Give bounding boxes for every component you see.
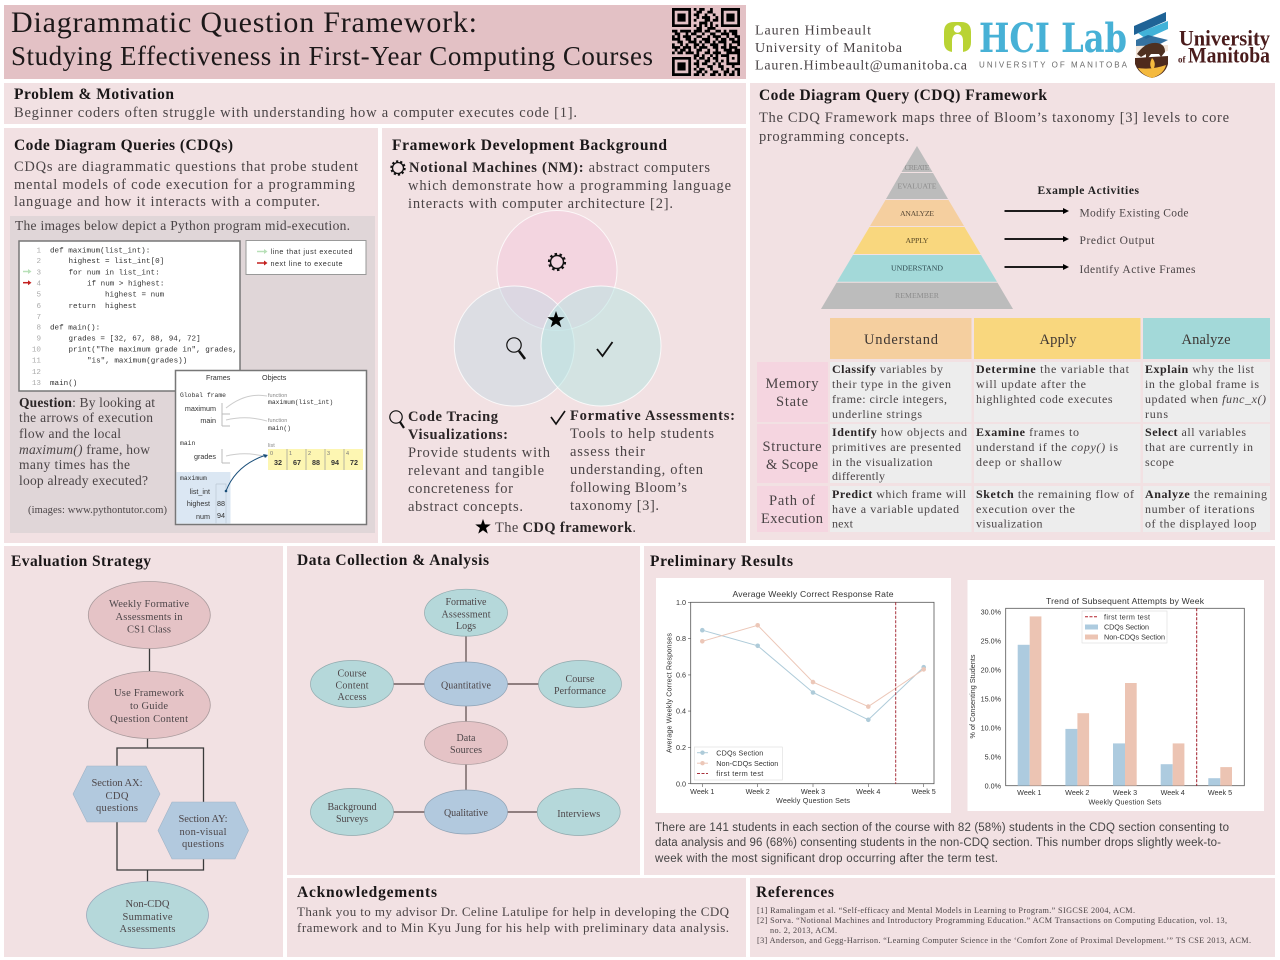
memory diagram: main	[200, 416, 216, 425]
table: concept by level: in the global frame is	[1145, 377, 1259, 391]
bar chart: trend of subsequent attempts	[968, 580, 1264, 811]
panel: acknowledgements: framework and to Min Kyu Jung for his help with preliminary data analysis.	[297, 920, 729, 935]
heading: preliminary results: Preliminary Results	[650, 553, 793, 570]
node: section AY: non-visual	[180, 827, 227, 838]
connectors	[393, 636, 539, 812]
pyramid: Bloom's taxonomy: REMEMBER	[895, 291, 940, 300]
panel: references: no. 2, 2013, ACM.	[770, 926, 837, 935]
bar chart: trend of subsequent attempts: Week 2	[1065, 788, 1089, 797]
question text: the arrows of execution	[19, 410, 153, 425]
line chart: average weekly correct response rate: Average Weekly Correct Response Rate	[732, 589, 894, 599]
bar chart: trend of subsequent attempts: Trend of Subsequent Attempts by Week	[1046, 596, 1205, 606]
node: qualitative	[424, 790, 508, 834]
question text: Question: By looking at	[19, 395, 155, 410]
line chart: average weekly correct response rate: 0.2	[676, 743, 686, 752]
pyramid: Bloom's taxonomy	[821, 146, 1013, 309]
text block: code tracing visualizations: Provide students with	[408, 445, 551, 461]
icon: check mark	[597, 342, 612, 356]
table: concept by level: Structure	[762, 439, 822, 455]
node: summative assessments: Assessments	[120, 924, 176, 935]
code listing: 5	[36, 292, 41, 300]
table: concept by level: next	[832, 516, 854, 530]
text block: CDQ definition	[14, 159, 358, 210]
bar chart: trend of subsequent attempts: Week 5	[1208, 788, 1232, 797]
table: concept by level: Predict which frame will	[832, 487, 967, 501]
venn diagram	[454, 210, 661, 406]
flow connectors	[117, 648, 204, 882]
logo: HCI Lab: HCI Lab	[979, 15, 1127, 62]
table: concept by level: have a variable updated	[832, 502, 959, 516]
table: concept by level: Execution	[761, 511, 824, 527]
line chart: average weekly correct response rate: 0.0	[676, 779, 686, 788]
memory diagram: main()	[268, 425, 291, 432]
line chart: average weekly correct response rate: 0.4	[676, 707, 686, 716]
image credit: (images: www.pythontutor.com)	[28, 505, 168, 516]
code listing: def main():	[50, 324, 100, 332]
memory diagram: 2	[308, 451, 311, 457]
node: background surveys	[310, 788, 394, 836]
table: concept by level: execution over the	[976, 502, 1075, 516]
node: data sources: Sources	[450, 745, 482, 756]
arrow: identify active frames	[1004, 264, 1196, 276]
code listing: highest = num	[105, 292, 165, 300]
table: concept by level: that are currently in	[1145, 440, 1253, 454]
logo: HCI Lab: UNIVERSITY OF MANITOBA	[979, 60, 1128, 70]
panel: CDQ framework	[750, 83, 1275, 540]
code listing: print("The maximum grade in", grades,	[68, 346, 237, 354]
node: course content access	[310, 660, 394, 708]
node: section AX: questions	[96, 803, 138, 814]
node: course content access: Content	[336, 680, 369, 692]
example activities heading: Example Activities	[1038, 185, 1140, 197]
bar chart: trend of subsequent attempts: 30.0%	[981, 607, 1002, 616]
arrow legend: next line to execute	[270, 259, 342, 268]
arrow: modify existing code	[1004, 208, 1188, 220]
panel: acknowledgements: Acknowledgements	[297, 884, 437, 901]
text block: notional machines: Notional Machines (NM): abstract computers	[409, 160, 710, 176]
bar chart: trend of subsequent attempts: 0.0%	[985, 781, 1002, 790]
memory diagram: highest	[187, 499, 210, 508]
node: section AY	[158, 802, 248, 859]
node: use framework: to Guide	[130, 701, 168, 712]
arrow legend: line that just executed	[270, 247, 352, 256]
line chart: average weekly correct response rate: CDQs Section	[716, 748, 763, 757]
code listing: main()	[50, 380, 77, 388]
table: concept by level: underline strings	[832, 407, 922, 421]
line chart: average weekly correct response rate: 1.0	[676, 598, 686, 607]
node: summative assessments	[86, 882, 208, 948]
node: section AY: Section AY:	[178, 814, 228, 825]
table: concept by level: State	[776, 394, 808, 410]
panel: problem and motivation: Problem & Motivation	[14, 86, 174, 103]
text block: formative assessments: taxonomy [3].	[570, 498, 659, 514]
table: concept by level: their type in the given	[832, 377, 951, 391]
node: course performance	[538, 660, 622, 708]
code listing: 13	[32, 380, 41, 388]
author block	[755, 24, 968, 74]
code listing: 1	[36, 248, 41, 256]
question text: flow and the local	[19, 426, 121, 441]
node: course content access: Access	[338, 692, 367, 703]
memory diagram: 3	[327, 451, 330, 457]
table: concept by level: Select all variables	[1145, 425, 1246, 439]
memory diagram: grades	[194, 452, 216, 461]
line chart: average weekly correct response rate: 0.8	[676, 634, 686, 643]
panel: code diagram queries	[4, 128, 378, 543]
table: concept by level: & Scope	[766, 457, 818, 473]
example inset	[10, 216, 375, 533]
table: concept by level: Explain why the list	[1145, 362, 1255, 376]
line chart: average weekly correct response rate: Weekly Question Sets	[776, 796, 850, 805]
bar chart: trend of subsequent attempts: 25.0%	[981, 636, 1002, 645]
panel: acknowledgements	[287, 878, 746, 957]
code listing: 9	[36, 336, 41, 344]
bar chart: trend of subsequent attempts: first term test	[1104, 612, 1150, 621]
bar chart: trend of subsequent attempts: 10.0%	[981, 723, 1002, 732]
panel: acknowledgements: Thank you to my advisor Dr. Celine Latulipe for help in developing the CDQ	[297, 904, 730, 919]
table: concept by level: Identify how objects and	[832, 425, 967, 439]
arrow: identify active frames: Identify Active Frames	[1080, 264, 1196, 276]
node: use framework: Question Content	[110, 714, 188, 725]
memory diagram: 88	[312, 458, 320, 467]
memory diagram: 94	[217, 511, 225, 520]
pyramid: Bloom's taxonomy: APPLY	[906, 236, 929, 245]
arrow: modify existing code: Modify Existing Code	[1080, 208, 1188, 220]
code listing: 4	[36, 280, 41, 288]
node: qualitative: Qualitative	[444, 808, 489, 819]
panel: problem and motivation: Beginner coders often struggle with understanding how a computer executes code [1].	[14, 105, 577, 121]
code listing: if num > highest:	[87, 280, 164, 288]
pyramid: Bloom's taxonomy: ANALYZE	[900, 209, 934, 218]
code listing: 3	[36, 270, 41, 278]
text block: formative assessments: assess their	[570, 444, 645, 460]
text block: code tracing visualizations	[408, 409, 551, 515]
memory diagram: 0	[270, 451, 273, 457]
text block: results summary: There are 141 students in each section of the course with 82 (58%) students in the CDQ section consenting to	[655, 822, 1229, 834]
title banner: Diagrammatic Question Framework:	[11, 6, 477, 39]
bar chart: trend of subsequent attempts: Week 1	[1017, 788, 1041, 797]
text block: results summary: week with the most significant drop occurring after the term test.	[654, 853, 998, 865]
logo: University of Manitoba crest	[1134, 12, 1270, 78]
text block: formative assessments	[570, 408, 735, 514]
table: concept by level: in the visualization	[832, 455, 932, 469]
arrow legend	[246, 240, 366, 274]
pyramid: Bloom's taxonomy: CREATE	[904, 163, 930, 172]
code listing: 7	[36, 314, 41, 322]
bar chart: trend of subsequent attempts: 5.0%	[985, 752, 1002, 761]
panel: references	[750, 878, 1275, 957]
text block: results summary: data analysis and 96 (68%) consenting students in the non-CDQ section. This number drops slightly week-to-	[655, 837, 1221, 849]
arrow: predict output: Predict Output	[1080, 235, 1155, 247]
table: concept by level	[757, 318, 1270, 532]
icon: star	[547, 311, 565, 327]
heading: CDQ framework: Code Diagram Query (CDQ) Framework	[759, 87, 1047, 104]
logo: HCI Lab	[944, 15, 1128, 70]
table: concept by level: Analyze the remaining	[1145, 487, 1267, 501]
icon: check legend	[551, 411, 565, 424]
pyramid: Bloom's taxonomy: EVALUATE	[898, 182, 937, 190]
code listing: grades = [32, 67, 88, 94, 72]	[68, 336, 201, 344]
memory diagram: Objects	[262, 373, 287, 382]
text block: formative assessments: following Bloom’s	[570, 480, 687, 496]
icon: magnifier legend	[390, 411, 404, 428]
text block: framework intro: The CDQ Framework maps three of Bloom’s taxonomy [3] levels to core	[759, 110, 1229, 126]
memory diagram: Frames	[206, 373, 231, 382]
panel: references: [3] Anderson, and Gegg-Harrison. “Learning Computer Science in the ‘Comfort Zone of Proximal Development.’” TS CSE 2013, ACM.	[757, 936, 1251, 945]
node: use framework: Use Framework	[114, 688, 185, 699]
table: concept by level: Analyze	[1182, 332, 1230, 348]
code listing: for num in list_int:	[68, 270, 160, 278]
line chart: average weekly correct response rate: 0.6	[676, 670, 686, 680]
memory diagram: num	[196, 512, 210, 521]
table: concept by level: understand if the copy() is	[976, 440, 1118, 454]
panel: references: [2] Sorva. “Notional Machines and Introductory Programming Education.” ACM Transactions on Computing Education, vol. 13,	[757, 916, 1227, 925]
code listing	[19, 241, 240, 391]
table: concept by level: differently	[832, 469, 885, 483]
heading: CDQs: Code Diagram Queries (CDQs)	[14, 137, 233, 154]
logo: University of Manitoba crest: Manitoba	[1188, 42, 1270, 68]
node: interviews: Interviews	[557, 809, 600, 820]
node: formative logs: Formative	[446, 597, 487, 608]
author block: Lauren Himbeault	[755, 24, 871, 38]
table: concept by level: primitives are presented	[832, 440, 961, 454]
table: concept by level: Determine the variable that	[976, 362, 1130, 376]
memory diagram: list_int	[190, 487, 210, 496]
node: data sources	[424, 722, 508, 764]
code listing: highest = list_int[0]	[68, 258, 164, 266]
icon: gear	[549, 254, 565, 270]
bar chart: trend of subsequent attempts: Weekly Question Sets	[1088, 798, 1162, 806]
node: section AX	[73, 766, 160, 822]
line chart: average weekly correct response rate: Week 1	[690, 787, 714, 796]
text block: results summary	[654, 822, 1229, 865]
node: course content access: Course	[338, 668, 367, 680]
table: concept by level: number of iterations	[1145, 502, 1255, 516]
memory diagram: maximum	[180, 475, 207, 482]
panel: evaluation strategy	[4, 546, 283, 957]
memory diagram: list	[268, 443, 275, 449]
table: concept by level: runs	[1145, 407, 1168, 421]
table: concept by level: scope	[1145, 455, 1174, 469]
memory diagram: maximum(list_int)	[268, 399, 333, 406]
memory diagram: 94	[331, 458, 339, 467]
memory diagram	[176, 370, 366, 524]
node: formative logs: Assessment	[442, 610, 491, 620]
memory diagram: 4	[346, 451, 349, 457]
table: concept by level: highlighted code executes	[976, 392, 1113, 406]
text block: code tracing visualizations: relevant and tangible	[408, 463, 544, 479]
memory diagram: 32	[274, 458, 282, 467]
example inset: The images below depict a Python program mid-execution.	[15, 218, 350, 233]
memory diagram: main	[180, 440, 196, 447]
memory diagram: Global frame	[180, 392, 226, 399]
bar chart: trend of subsequent attempts: Week 4	[1161, 788, 1185, 797]
node: use framework	[88, 672, 210, 738]
node: weekly formative assessments: CS1 Class	[127, 624, 171, 636]
code listing: 11	[32, 358, 41, 366]
code listing: 8	[36, 324, 41, 332]
text block: notional machines: interacts with computer architecture [2].	[408, 196, 673, 212]
author block: Lauren.Himbeault@umanitoba.ca	[755, 58, 968, 74]
node: weekly formative assessments: Weekly Formative	[109, 599, 189, 610]
text block: formative assessments: understanding, often	[570, 462, 704, 478]
table: concept by level: frame: circle integers,	[832, 392, 947, 406]
bar chart: trend of subsequent attempts: Week 3	[1113, 788, 1137, 797]
panel: preliminary results	[644, 546, 1275, 875]
line chart: average weekly correct response rate: Average Weekly Correct Responses	[664, 633, 674, 753]
logo: University of Manitoba crest: University	[1179, 26, 1270, 50]
panel: references: [1] Ramalingam et al. “Self-efficacy and Mental Models in Learning to Program.” SIGCSE 2004, ACM.	[757, 906, 1135, 915]
text block: CDQ definition: mental models of code execution for a programming	[14, 177, 355, 193]
code listing: def maximum(list_int):	[50, 248, 150, 256]
node: weekly formative assessments: Assessments in	[116, 612, 183, 623]
table: concept by level: Apply	[1040, 332, 1077, 348]
table: concept by level: Path of	[769, 493, 815, 509]
line chart: average weekly correct response rate: Week 4	[856, 787, 880, 796]
memory diagram: maximum	[185, 404, 216, 413]
heading: data collection: Data Collection & Analysis	[297, 552, 489, 569]
title banner	[4, 5, 746, 79]
question text	[19, 395, 155, 488]
table: concept by level: Memory	[766, 376, 819, 392]
bar chart: trend of subsequent attempts: % of Consenting Students	[968, 654, 977, 738]
heading: framework background: Framework Development Background	[392, 137, 667, 154]
node: quantitative	[424, 662, 508, 706]
question text: many times has the	[19, 457, 130, 472]
node: section AY: questions	[182, 839, 224, 850]
node: weekly formative assessments	[88, 582, 210, 648]
icon: gear legend	[391, 161, 405, 175]
line chart: average weekly correct response rate	[656, 578, 951, 813]
table: concept by level: visualization	[976, 516, 1042, 530]
text block: framework intro: programming concepts.	[759, 129, 909, 145]
node: background surveys: Background	[328, 802, 376, 813]
text block: code tracing visualizations: Code Tracing	[408, 409, 499, 425]
panel: problem and motivation	[4, 83, 746, 124]
text block: code tracing visualizations: abstract concepts.	[408, 499, 523, 515]
text block: code tracing visualizations: concreteness for	[408, 481, 513, 497]
node: section AX: Section AX:	[92, 778, 143, 789]
text block: CDQ definition: language and how it interacts with a computer.	[14, 194, 320, 210]
memory diagram: 1	[289, 451, 292, 457]
code listing: "is", maximum(grades))	[87, 358, 187, 366]
node: interviews	[537, 788, 620, 836]
star legend: The CDQ framework.	[495, 520, 636, 536]
text block: formative assessments: Tools to help students	[570, 426, 714, 442]
text block: formative assessments: Formative Assessments:	[570, 408, 735, 424]
question text: maximum() frame, how	[19, 442, 150, 457]
line chart: average weekly correct response rate: Week 3	[801, 787, 825, 796]
table: concept by level: Classify variables by	[832, 362, 943, 376]
node: formative logs: Logs	[456, 621, 476, 632]
node: course performance: Course	[566, 674, 595, 685]
question text: loop already executed?	[19, 473, 148, 488]
line chart: average weekly correct response rate: Week 5	[912, 787, 936, 796]
text block: code tracing visualizations: Visualizations:	[408, 427, 508, 443]
memory diagram: function	[268, 418, 287, 424]
node: section AX: CDQ	[106, 791, 129, 802]
code listing: return highest	[68, 303, 137, 311]
table: concept by level: Understand	[864, 332, 939, 348]
panel: framework development background	[382, 128, 746, 543]
pyramid: Bloom's taxonomy: UNDERSTAND	[891, 264, 943, 272]
panel: references: References	[756, 884, 834, 901]
line chart: average weekly correct response rate: first term test	[716, 769, 763, 778]
node: quantitative: Quantitative	[441, 680, 492, 692]
memory diagram: 72	[350, 458, 358, 467]
text block: notional machines	[408, 160, 731, 212]
arrow: predict output	[1004, 235, 1155, 247]
line chart: average weekly correct response rate: Non-CDQs Section	[716, 759, 778, 768]
code listing: 2	[36, 258, 41, 266]
heading: evaluation: Evaluation Strategy	[11, 553, 151, 570]
memory diagram: 88	[217, 499, 225, 508]
logo: University of Manitoba crest: of	[1178, 54, 1186, 64]
text block: framework intro	[759, 110, 1229, 145]
code listing: 10	[32, 346, 41, 354]
table: concept by level: updated when func_x()	[1145, 392, 1266, 406]
text block: notional machines: which demonstrate how a programming language	[408, 178, 731, 194]
bar chart: trend of subsequent attempts: 15.0%	[981, 694, 1002, 703]
panel: data collection and analysis	[287, 546, 640, 875]
node: course performance: Performance	[554, 686, 607, 697]
bar chart: trend of subsequent attempts: CDQs Section	[1104, 623, 1149, 632]
bar chart: trend of subsequent attempts: Non-CDQs Section	[1104, 633, 1165, 642]
node: formative logs	[424, 589, 508, 636]
line chart: average weekly correct response rate: Week 2	[746, 787, 770, 796]
table: concept by level: Sketch the remaining flow of	[976, 487, 1134, 501]
node: background surveys: Surveys	[336, 814, 368, 825]
bar chart: trend of subsequent attempts: 20.0%	[981, 665, 1002, 674]
author block: University of Manitoba	[755, 41, 903, 56]
memory diagram: 67	[293, 458, 301, 467]
code listing: 6	[36, 303, 41, 311]
table: concept by level: will update after the	[976, 377, 1086, 391]
QR code	[672, 9, 740, 75]
memory diagram: function	[268, 393, 287, 399]
node: summative assessments: Non-CDQ	[126, 899, 170, 910]
code listing: 12	[32, 369, 41, 377]
title banner: Studying Effectiveness in First-Year Computing Courses	[11, 41, 653, 71]
table: concept by level: deep or shallow	[976, 455, 1062, 469]
table: concept by level: Examine frames to	[976, 425, 1079, 439]
table: concept by level: of the displayed loop	[1145, 516, 1256, 530]
node: data sources: Data	[456, 733, 476, 744]
text block: CDQ definition: CDQs are diagrammatic questions that probe student	[14, 159, 358, 175]
icon: magnifier	[507, 338, 525, 359]
node: summative assessments: Summative	[122, 912, 173, 923]
